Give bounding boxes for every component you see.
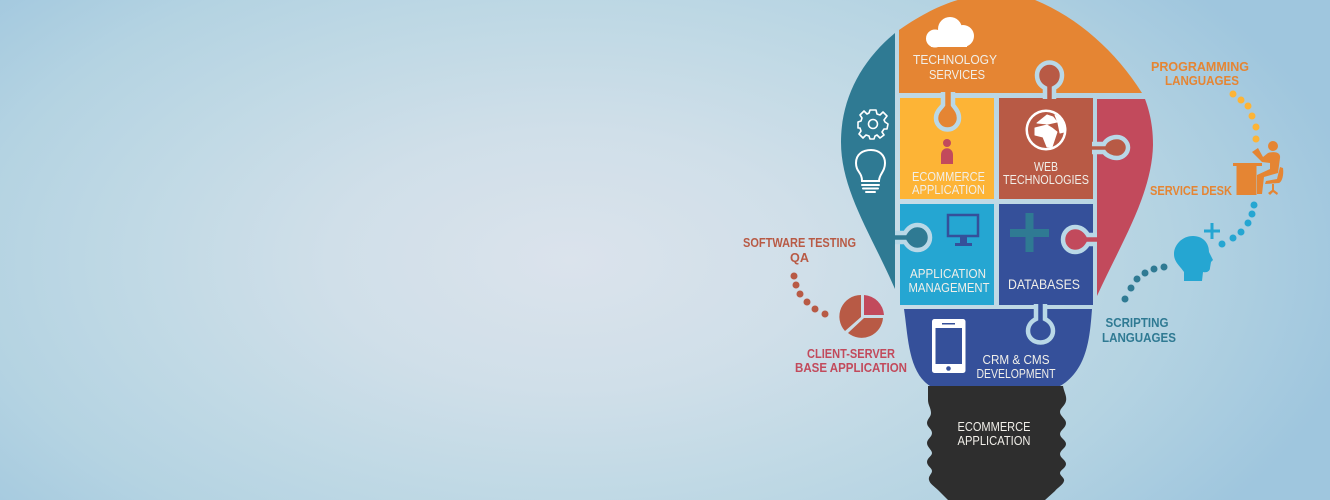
label: software testing qa: QA bbox=[790, 250, 810, 265]
label: client-server base application: CLIENT-SERVER bbox=[807, 346, 896, 361]
icon: person bbox=[941, 139, 953, 164]
panel: databases tile bbox=[999, 204, 1097, 342]
heading: web technologies: TECHNOLOGIES bbox=[1003, 172, 1089, 187]
icon: gear bbox=[858, 110, 888, 139]
icon: blue plus bbox=[1204, 223, 1220, 239]
red puzzle knob bbox=[1063, 227, 1097, 252]
heading: web technologies: WEB bbox=[1034, 159, 1058, 174]
panel: black bulb base bbox=[927, 386, 1066, 500]
teal puzzle knob bbox=[895, 225, 930, 250]
label: scripting languages bbox=[1102, 315, 1176, 345]
icon: pie chart bbox=[839, 295, 884, 338]
icon: head profile bbox=[1174, 236, 1213, 281]
label: software testing qa bbox=[743, 235, 856, 265]
icon: light bulb outline bbox=[856, 150, 885, 192]
heading: application management: MANAGEMENT bbox=[908, 280, 990, 295]
brown right knob bbox=[1092, 137, 1128, 158]
icon: teal plus bbox=[1010, 213, 1049, 252]
brown dotted arc bbox=[790, 272, 828, 318]
panel: orange technology services bbox=[899, 0, 1142, 93]
heading: technology services: SERVICES bbox=[929, 67, 985, 82]
panel: teal left piece bbox=[841, 33, 895, 289]
panel: red right piece bbox=[1097, 99, 1153, 296]
icon: globe bbox=[1026, 110, 1066, 150]
heading: crm and cms development: CRM & CMS bbox=[982, 352, 1050, 367]
label: scripting languages: LANGUAGES bbox=[1102, 330, 1176, 345]
label: service desk: SERVICE DESK bbox=[1150, 183, 1233, 198]
lightbulb puzzle bbox=[841, 0, 1153, 500]
yellow dotted arc bbox=[1230, 90, 1260, 142]
label: client-server base application: BASE APPLICATION bbox=[795, 360, 907, 375]
panel: application management tile bbox=[895, 204, 994, 305]
heading: databases: DATABASES bbox=[1008, 276, 1080, 292]
heading: ecommerce application base: ECOMMERCE bbox=[958, 419, 1031, 434]
teal dotted arc bbox=[1122, 264, 1168, 302]
label: software testing qa: SOFTWARE TESTING bbox=[743, 235, 856, 250]
blue bottom knob bbox=[1028, 304, 1053, 342]
icon: monitor bbox=[948, 215, 978, 246]
label: scripting languages: SCRIPTING bbox=[1106, 315, 1168, 330]
icon: smartphone bbox=[932, 319, 966, 373]
heading: ecommerce application base: APPLICATION bbox=[958, 433, 1030, 448]
icon: person at service desk bbox=[1233, 141, 1283, 195]
label: programming languages bbox=[1151, 59, 1249, 88]
orange puzzle knob bbox=[936, 92, 959, 130]
icon: cloud bbox=[926, 17, 974, 48]
heading: application management: APPLICATION bbox=[910, 266, 986, 281]
heading: ecommerce application: ECOMMERCE bbox=[912, 169, 985, 184]
heading: crm and cms development: DEVELOPMENT bbox=[976, 366, 1056, 381]
panel: crm and cms development bbox=[904, 309, 1092, 386]
heading: ecommerce application: APPLICATION bbox=[912, 182, 985, 197]
heading: technology services: TECHNOLOGY bbox=[913, 52, 997, 67]
blue dotted arc bbox=[1218, 202, 1258, 248]
panel: web technologies tile bbox=[999, 62, 1128, 199]
label: client-server base application bbox=[795, 346, 907, 375]
label: programming languages: LANGUAGES bbox=[1165, 73, 1239, 88]
panel: ecommerce application tile bbox=[900, 92, 994, 199]
label: programming languages: PROGRAMMING bbox=[1151, 59, 1249, 74]
brown top knob bbox=[1037, 62, 1062, 99]
